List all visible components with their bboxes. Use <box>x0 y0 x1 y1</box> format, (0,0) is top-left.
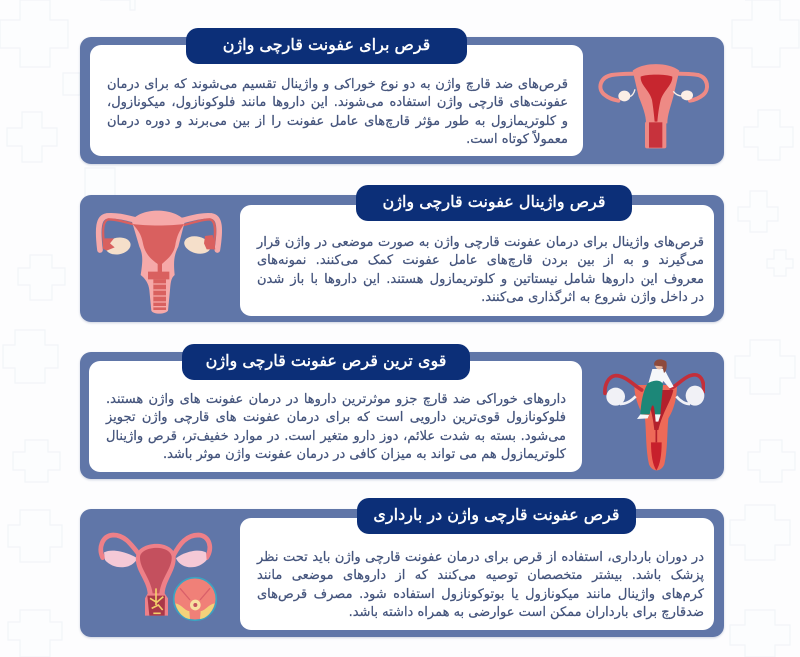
text block: pregnancy: پزشک باشد. بیشتر متخصصان توصیه می‌کنند که از داروهای موضعی مانند <box>257 568 704 583</box>
text block: pregnancy: در دوران بارداری، استفاده از قرص برای درمان عفونت قارچی واژن باید تحت نظر <box>257 550 704 565</box>
text block: vaginal pills: در داخل واژن شروع به اثرگذاری می‌کنند. <box>481 290 704 305</box>
text block: strongest pill: داروهای خوراکی ضد قارچ جزو موثرترین داروها در درمان عفونت های واژن هستند. <box>106 392 566 407</box>
text block: oral pills <box>107 77 568 147</box>
text block: oral pills: معمولاً کوتاه است. <box>466 132 568 147</box>
panel: strongest pill <box>80 352 724 479</box>
text block: pregnancy <box>256 550 704 620</box>
text card: pregnancy <box>240 518 714 630</box>
icon: pink uterus <box>96 210 222 314</box>
text block: vaginal pills: معروف این داروها شامل نیستاتین و کلوتریمازول هستند. این داروها با باز شدن <box>257 272 704 287</box>
panel: vaginal pills <box>80 195 724 322</box>
panel: oral antifungal pills <box>80 37 724 164</box>
text block: vaginal pills: قرص‌های واژینال برای درمان عفونت قارچی واژن به صورت موضعی در واژن قرار <box>257 235 704 250</box>
icon: woman sitting on uterus <box>603 359 705 470</box>
text block: oral pills: قرص‌های ضد قارچ واژن به دو نوع خوراکی و واژینال تقسیم می‌شوند که برای درمان <box>107 77 568 92</box>
heading: strongest pill <box>182 344 470 380</box>
text block: vaginal pills <box>256 235 704 305</box>
text block: strongest pill: می‌شود. بسته به شدت علائم، دوز دارو متغیر است. در موارد خفیف‌تر، قرص واژینال <box>106 429 566 444</box>
icon: uterus with red cavity <box>598 64 709 148</box>
heading: vaginal pills <box>356 185 632 221</box>
text block: strongest pill: کلوتریمازول هم می تواند به میزان کافی در درمان عفونت واژن موثر باشد. <box>163 447 566 462</box>
icon: infected uterus with magnified cervix <box>98 532 218 622</box>
text block: strongest pill: فلوکونازول قوی‌ترین دارویی است که برای درمان عفونت های قارچی واژن تجویز <box>106 410 566 425</box>
text card: oral pills <box>90 45 583 156</box>
text block: pregnancy: ضدقارچ برای بارداران ممکن است عوارضی به همراه داشته باشد. <box>349 605 704 620</box>
heading: vaginal pills: قرص واژینال عفونت قارچی واژن <box>382 192 606 211</box>
heading: pregnancy: قرص عفونت قارچی واژن در بارداری <box>373 505 620 524</box>
heading: strongest pill: قوی ترین قرص عفونت قارچی واژن <box>206 351 446 370</box>
panel: pills during pregnancy <box>80 509 724 637</box>
text card: strongest pill <box>89 361 582 472</box>
text block: strongest pill <box>105 392 566 462</box>
heading: pregnancy <box>357 498 636 534</box>
text block: vaginal pills: می‌گیرند و به از بین بردن قارچ‌های عامل عفونت کمک می‌کنند. نمونه‌های <box>257 253 704 268</box>
heading: oral pills <box>186 28 467 64</box>
text card: vaginal pills <box>240 205 714 316</box>
woman figure <box>637 359 674 422</box>
heading: oral pills: قرص برای عفونت قارچی واژن <box>223 35 430 54</box>
text block: oral pills: عفونت‌های قارچی واژن استفاده می‌شوند. این داروها مانند فلوکونازول، میکونازول، <box>107 95 568 110</box>
text block: pregnancy: کرم‌های واژینال مانند میکونازول یا بوتوکونازول استفاده شود. مصرف قرص‌های <box>257 587 704 602</box>
text block: oral pills: و کلوتریمازول به طور مؤثر قارچ‌های عامل عفونت را از بین می‌برند و دوره درمان <box>107 114 568 129</box>
